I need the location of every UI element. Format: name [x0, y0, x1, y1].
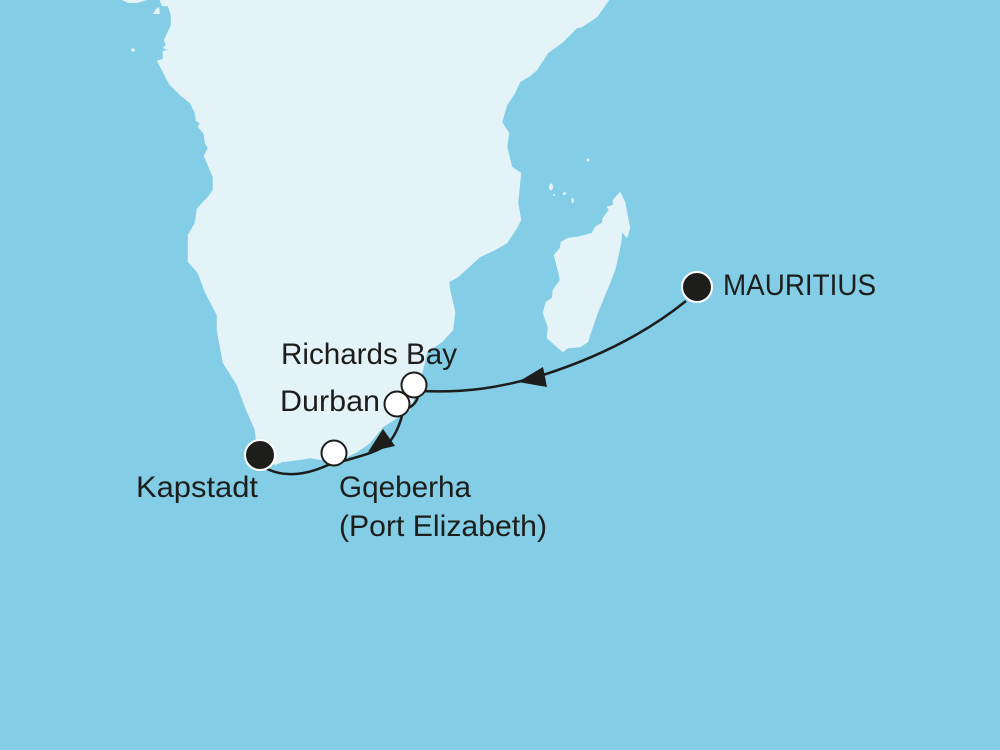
- route line: Mauritius to Richards Bay: [420, 301, 686, 391]
- marker: Gqeberha: [322, 440, 346, 466]
- land: Madagascar: [543, 192, 630, 352]
- marker: Kapstadt: [245, 440, 275, 470]
- label: Kapstadt: Kapstadt: [136, 471, 259, 504]
- arrow: towards Richards Bay: [518, 367, 547, 387]
- land: southern Africa: [157, 0, 609, 465]
- marker: Mauritius: [682, 272, 712, 302]
- small islands: [122, 0, 590, 203]
- label: Port Elizabeth: (Port Elizabeth): [339, 510, 547, 543]
- arrow: towards Gqeberha: [368, 429, 395, 452]
- label: Gqeberha: Gqeberha: [339, 471, 471, 504]
- marker: Richards Bay: [402, 372, 426, 398]
- label: Durban: Durban: [280, 385, 380, 418]
- route line: Richards Bay to Durban: [404, 396, 418, 410]
- route line: Durban to Kapstadt: [267, 416, 402, 474]
- marker: Durban: [384, 392, 410, 416]
- label: Richards Bay: Richards Bay: [281, 338, 457, 371]
- label: Mauritius: MAURITIUS: [723, 269, 876, 302]
